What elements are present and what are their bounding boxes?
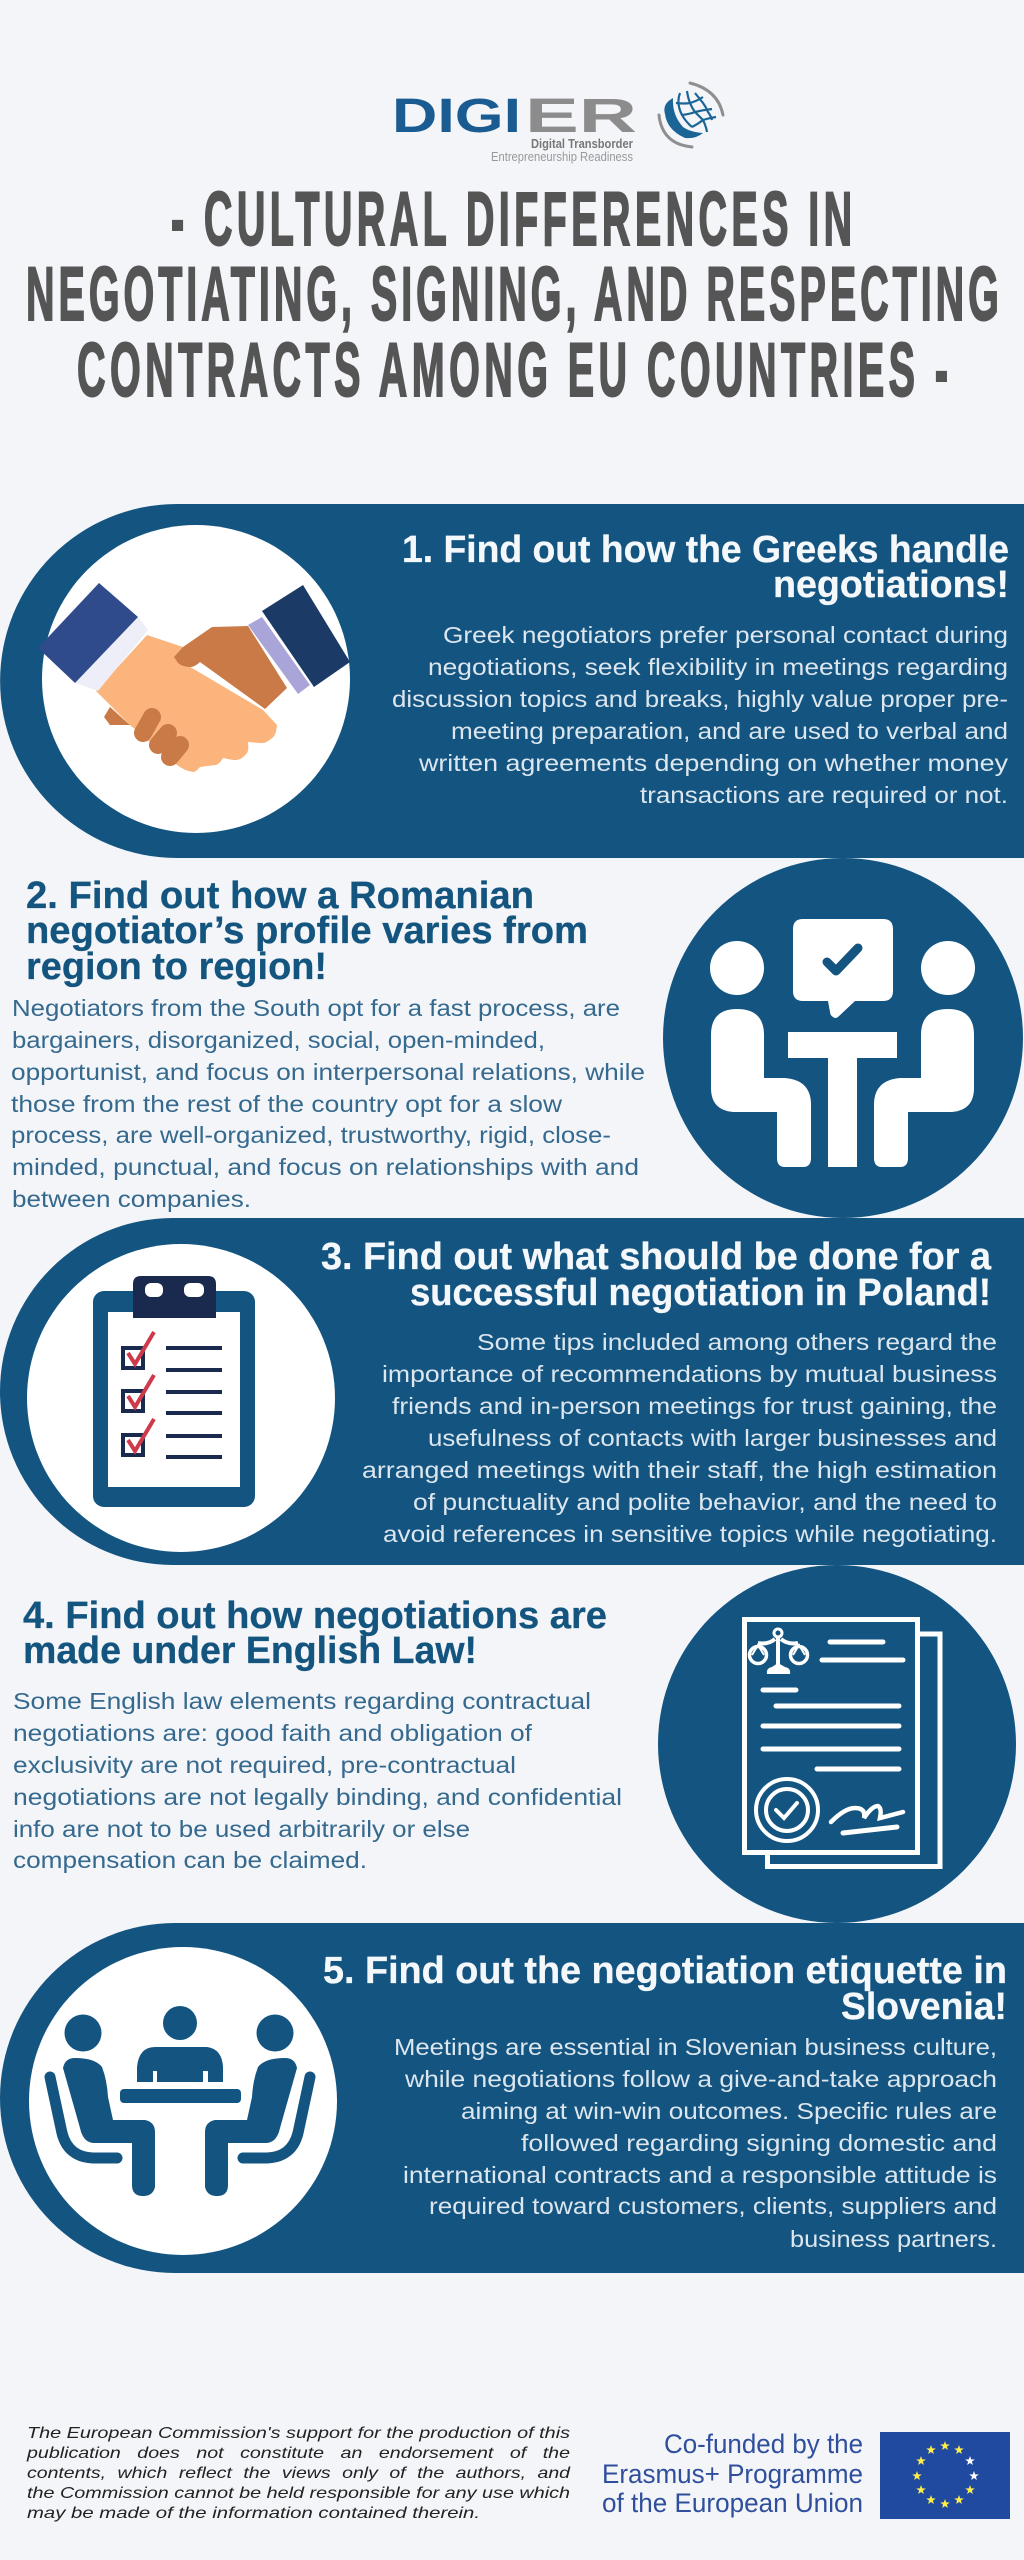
disclaimer text: the Commission cannot be held responsible for any use which bbox=[27, 2485, 570, 2502]
panel 3 body text: friends and in-person meetings for trust gaining, the bbox=[392, 1393, 997, 1419]
co-funded statement bbox=[602, 2429, 863, 2518]
panel 5 body text: while negotiations follow a give-and-take approach bbox=[404, 2066, 997, 2092]
panel 5 heading: Slovenia! bbox=[841, 1986, 1007, 2028]
co-funded statement: Erasmus+ Programme bbox=[602, 2459, 863, 2489]
panel 5 heading: 5. Find out the negotiation etiquette in bbox=[323, 1950, 1007, 1992]
panel 3 body text: usefulness of contacts with larger businesses and bbox=[428, 1425, 997, 1451]
co-funded statement: Co-funded by the bbox=[664, 2429, 863, 2459]
disclaimer text bbox=[26, 2425, 571, 2522]
panel 1 body text: written agreements depending on whether money bbox=[418, 750, 1008, 776]
co-funded statement: of the European Union bbox=[602, 2488, 863, 2518]
panel 1 body text: Greek negotiators prefer personal contact during bbox=[443, 622, 1008, 648]
logo wordmark: ER bbox=[525, 90, 637, 143]
panel 4 body text: compensation can be claimed. bbox=[13, 1847, 367, 1873]
panel 4 body text bbox=[13, 1688, 622, 1873]
panel 5 body text: business partners. bbox=[790, 2226, 997, 2252]
title bbox=[26, 176, 999, 412]
panel 2 heading bbox=[26, 875, 588, 988]
panel 2 heading: 2. Find out how a Romanian bbox=[26, 875, 534, 917]
logo: DIGIER bbox=[392, 83, 723, 164]
panel 3 heading: 3. Find out what should be done for a bbox=[321, 1236, 992, 1278]
disclaimer text: publication does not constitute an endorsement of the bbox=[26, 2445, 570, 2462]
panel 2 body text: between companies. bbox=[12, 1186, 251, 1212]
title: - CULTURAL DIFFERENCES IN bbox=[171, 176, 852, 261]
panel 2 body text: Negotiators from the South opt for a fast process, are bbox=[12, 995, 620, 1021]
panel 4 body text: info are not to be used arbitrarily or else bbox=[13, 1816, 470, 1842]
panel 1 body text: transactions are required or not. bbox=[640, 782, 1008, 808]
panel 5 heading bbox=[323, 1950, 1007, 2028]
logo tagline bbox=[491, 136, 633, 164]
title: CONTRACTS AMONG EU COUNTRIES - bbox=[77, 327, 948, 412]
icon: EU flag bbox=[880, 2432, 1010, 2519]
icon: two people at a table with speech bubble bbox=[663, 858, 1023, 1218]
panel 5 body text: followed regarding signing domestic and bbox=[521, 2130, 997, 2156]
panel 2 body text: those from the rest of the country opt for a slow bbox=[11, 1091, 563, 1117]
panel 5 body text: Meetings are essential in Slovenian business culture, bbox=[394, 2034, 997, 2060]
logo wordmark bbox=[392, 90, 637, 143]
icon: meeting around a table bbox=[29, 1947, 337, 2255]
panel 1 body text bbox=[392, 622, 1008, 808]
panel 3 heading bbox=[321, 1236, 992, 1314]
panel 1 heading bbox=[402, 529, 1009, 606]
panel 5: Slovenia bbox=[0, 1923, 1024, 2273]
panel 4 heading bbox=[23, 1595, 607, 1672]
panel 2 body text: bargainers, disorganized, social, open-minded, bbox=[12, 1027, 545, 1053]
panel 5 body text: required toward customers, clients, suppliers and bbox=[429, 2193, 997, 2219]
panel 1 body text: meeting preparation, and are used to verbal and bbox=[451, 718, 1008, 744]
panel 4 body text: exclusivity are not required, pre-contractual bbox=[13, 1752, 516, 1778]
panel 2 heading: region to region! bbox=[26, 946, 327, 988]
panel 1 body text: discussion topics and breaks, highly value proper pre- bbox=[392, 686, 1008, 712]
panel 3 body text: Some tips included among others regard the bbox=[477, 1329, 997, 1355]
panel 2 heading: negotiator’s profile varies from bbox=[26, 910, 588, 952]
panel 3 body text: of punctuality and polite behavior, and the need to bbox=[413, 1489, 997, 1515]
panel 1 body text: negotiations, seek flexibility in meetings regarding bbox=[428, 654, 1008, 680]
icon: legal contract with scale and stamp bbox=[658, 1565, 1016, 1923]
panel 3: Poland bbox=[0, 1218, 1024, 1565]
panel 2 body text: process, are well-organized, trustworthy, rigid, close- bbox=[11, 1122, 611, 1148]
disclaimer text: The European Commission's support for the production of this bbox=[27, 2425, 570, 2442]
panel 3 background bbox=[0, 1218, 1024, 1565]
panel 5 body text bbox=[394, 2034, 997, 2252]
logo wordmark: DIGI bbox=[392, 90, 521, 143]
panel 2 body text: minded, punctual, and focus on relationships with and bbox=[12, 1154, 639, 1180]
panel 3 body text: avoid references in sensitive topics while negotiating. bbox=[383, 1521, 997, 1547]
title: NEGOTIATING, SIGNING, AND RESPECTING bbox=[26, 251, 999, 336]
panel 4 heading: 4. Find out how negotiations are bbox=[23, 1595, 607, 1637]
panel 1 heading: 1. Find out how the Greeks handle bbox=[402, 529, 1009, 571]
panel 1 heading: negotiations! bbox=[773, 564, 1009, 606]
panel 5 body text: international contracts and a responsible attitude is bbox=[403, 2162, 997, 2188]
icon: globe bbox=[659, 83, 723, 147]
panel 1 background bbox=[0, 504, 1024, 858]
panel 5 background bbox=[0, 1923, 1024, 2273]
icon: handshake bbox=[38, 525, 350, 833]
panel 4: English Law bbox=[13, 1565, 1016, 1923]
icon: clipboard checklist bbox=[27, 1244, 335, 1552]
panel 1: Greeks bbox=[0, 504, 1024, 858]
panel 3 body text: importance of recommendations by mutual business bbox=[382, 1361, 997, 1387]
logo tagline: Digital Transborder bbox=[531, 136, 633, 151]
panel 4 body text: negotiations are not legally binding, and confidential bbox=[13, 1784, 622, 1810]
logo tagline: Entrepreneurship Readiness bbox=[491, 149, 633, 164]
panel 2 body text bbox=[11, 995, 645, 1212]
panel 2: Romania bbox=[11, 858, 1023, 1218]
panel 3 body text bbox=[362, 1329, 997, 1547]
panel 5 body text: aiming at win-win outcomes. Specific rules are bbox=[461, 2098, 997, 2124]
panel 3 heading: successful negotiation in Poland! bbox=[410, 1272, 991, 1314]
panel 4 heading: made under English Law! bbox=[23, 1630, 477, 1672]
panel 4 body text: negotiations are: good faith and obligation of bbox=[13, 1720, 533, 1746]
panel 2 body text: opportunist, and focus on interpersonal relations, while bbox=[11, 1059, 645, 1085]
panel 3 body text: arranged meetings with their staff, the high estimation bbox=[362, 1457, 997, 1483]
disclaimer text: may be made of the information contained therein. bbox=[27, 2505, 480, 2522]
disclaimer text: contents, which reflect the views only of the authors, and bbox=[27, 2465, 571, 2482]
panel 4 body text: Some English law elements regarding contractual bbox=[13, 1688, 591, 1714]
